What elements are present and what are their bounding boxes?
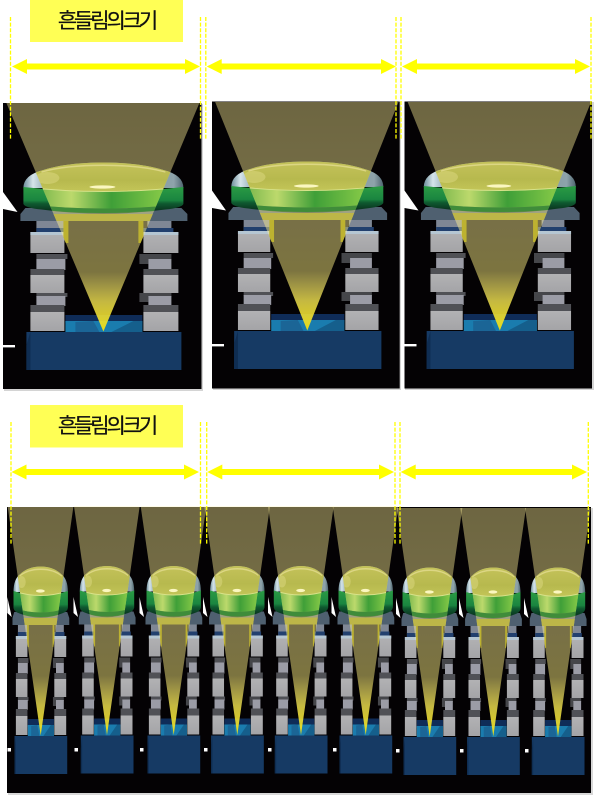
lens and sensor module [408, 102, 591, 369]
marker: white dash [212, 344, 224, 346]
panel: top row wide beam, position 3 [404, 102, 594, 390]
heading: bottom label [30, 405, 183, 448]
heading: top label [30, 0, 183, 42]
arrow: bottom row 1 [12, 464, 199, 480]
marker: white wedge [212, 190, 226, 210]
arrow: top row 1 [12, 59, 200, 74]
marker: white wedge [404, 190, 418, 210]
panel: top row wide beam, position 1 [3, 103, 203, 391]
arrow: bottom row 2 [207, 464, 394, 480]
dashed guides: bottom row [11, 422, 588, 544]
lens and sensor module [215, 102, 398, 369]
module 4 [204, 506, 270, 774]
module 2 [74, 506, 140, 774]
marker: white wedge [3, 192, 18, 212]
white wedge markers [7, 597, 529, 618]
white square markers [8, 748, 528, 752]
marker: white dash [404, 344, 416, 346]
module 3 [141, 506, 206, 774]
module 1 [8, 507, 73, 774]
module 6 [333, 506, 398, 774]
module 7 [397, 508, 462, 775]
module 5 [268, 506, 334, 774]
dashed guides: top row [10, 17, 591, 139]
lens and sensor module [6, 103, 199, 370]
arrow: top row 2 [207, 59, 396, 74]
arrow: bottom row 3 [401, 464, 587, 480]
module 8 [460, 508, 526, 775]
heading: bottom label: 흔들림의크기 [58, 415, 156, 438]
marker: white dash [3, 345, 15, 347]
module 9 [525, 508, 591, 775]
arrow: top row 3 [402, 59, 590, 74]
panel: bottom row narrow beams [7, 506, 593, 795]
panel: top row wide beam, position 2 [212, 102, 401, 390]
heading: top label: 흔들림의크기 [58, 10, 156, 33]
